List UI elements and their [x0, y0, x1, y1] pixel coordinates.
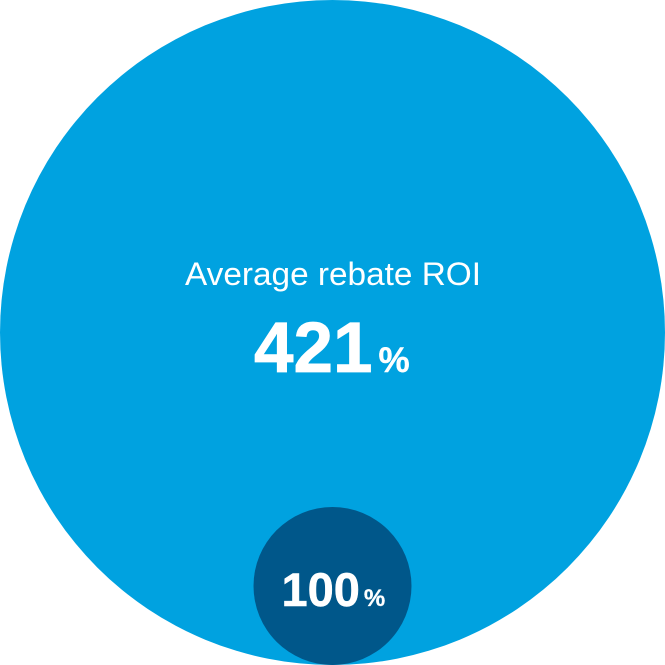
label: Average rebate ROI: Average rebate ROI	[185, 256, 481, 292]
value: 100%: 100%	[282, 563, 385, 616]
value: 421%: 421%	[254, 309, 410, 388]
small circle: 100% baseline	[254, 507, 412, 665]
